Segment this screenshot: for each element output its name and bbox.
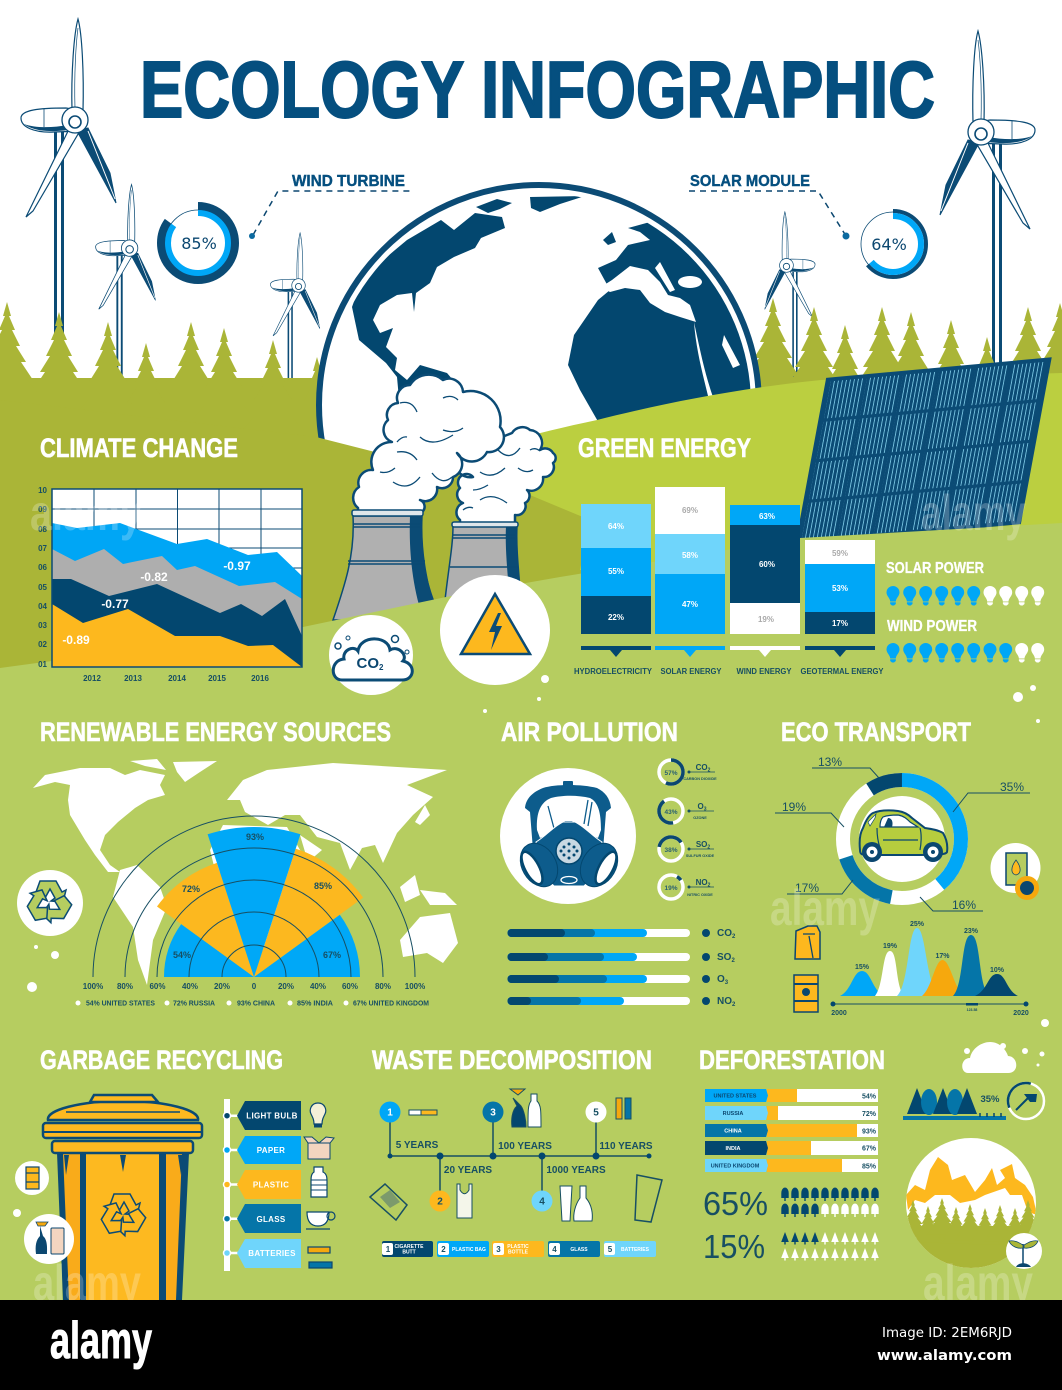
donut: eco transport	[775, 755, 1030, 920]
gas donuts: 57%	[664, 770, 678, 777]
bars: deforestation: UNITED STATES	[714, 1094, 757, 1100]
mountain chart: fuel use: 2020	[1013, 1010, 1029, 1017]
legend: countries	[76, 1000, 429, 1008]
area chart: climate change: 09	[38, 505, 48, 514]
gas donuts: 19%	[664, 885, 678, 892]
icon: axe gauge	[1003, 1078, 1049, 1124]
icon: gas mask	[500, 768, 636, 904]
progress bars: gases	[508, 928, 736, 1008]
stacked bars: green energy: 59%	[832, 549, 848, 558]
legend: waste items: 5	[608, 1245, 613, 1254]
pictogram: 15 percent	[703, 1228, 879, 1265]
mountain chart: fuel use: 25%	[910, 921, 925, 928]
footer bar: www.alamy.com	[877, 1348, 1012, 1364]
timeline: waste decomposition: 3	[490, 1108, 496, 1118]
area chart: climate change: 02	[38, 640, 48, 649]
pictogram: solar power: SOLAR POWER	[886, 560, 984, 577]
globe	[316, 182, 762, 452]
list: recyclable materials: LIGHT BULB	[246, 1112, 298, 1120]
polar chart: renewable energy: 20%	[278, 982, 294, 991]
polar chart: renewable energy: 60%	[342, 982, 358, 991]
gas donuts: O	[697, 802, 704, 811]
callout: wind turbine: WIND TURBINE	[292, 173, 405, 190]
stacked bars: green energy: HYDROELECTRICITY	[574, 667, 653, 676]
polar chart: renewable energy: 40%	[310, 982, 326, 991]
polar chart: renewable energy: 80%	[117, 982, 133, 991]
timeline: waste decomposition: 20 YEARS	[444, 1165, 492, 1176]
bars: deforestation: CHINA	[724, 1128, 742, 1134]
stacked bars: green energy: 60%	[759, 560, 775, 569]
polar chart: renewable energy	[83, 816, 425, 991]
stacked bars: green energy: 63%	[759, 512, 775, 521]
stacked bars: green energy: 69%	[682, 506, 698, 515]
area chart: climate change: 2014	[168, 674, 186, 683]
gas donuts	[655, 760, 717, 903]
legend: waste items: BATTERIES	[621, 1247, 650, 1253]
bars: deforestation: RUSSIA	[723, 1111, 743, 1117]
donut: eco transport: 35%	[1000, 780, 1024, 794]
mountain chart: fuel use: 19%	[883, 943, 898, 950]
stacked bars: green energy	[574, 487, 884, 676]
area chart: climate change: 08	[38, 525, 48, 534]
heading: eco transport: ECO TRANSPORT	[781, 717, 971, 747]
progress bars: gases: 2	[732, 1002, 736, 1008]
stacked bars: green energy: GEOTERMAL ENERGY	[800, 667, 884, 676]
gas donuts: 38%	[664, 847, 678, 854]
legend: countries: 54% UNITED STATES	[86, 1000, 155, 1008]
bars: deforestation: INDIA	[726, 1146, 741, 1152]
donut: 64 percent: 64%	[871, 235, 907, 254]
timeline: waste decomposition	[380, 1102, 653, 1212]
main green ground	[0, 523, 1062, 1300]
icon: CO2 cloud: CO	[357, 655, 379, 672]
heading: climate change: CLIMATE CHANGE	[40, 433, 238, 463]
bars: deforestation	[705, 1089, 878, 1172]
legend: waste items: PLASTIC	[507, 1244, 529, 1250]
list: recyclable materials: PLASTIC	[253, 1180, 289, 1190]
progress bars: gases: NO	[717, 996, 732, 1007]
pictogram: 65 percent	[703, 1185, 879, 1222]
area chart: climate change: 05	[38, 583, 48, 592]
progress bars: gases: 2	[732, 934, 736, 940]
footer bar: alamy	[50, 1312, 152, 1370]
donut: 64 percent	[860, 211, 926, 277]
cooling tower 2	[445, 522, 521, 600]
bars: deforestation: UNITED KINGDOM	[711, 1164, 760, 1170]
area chart: climate change: -0.97	[223, 559, 251, 573]
heading: deforestation: DEFORESTATION	[699, 1045, 885, 1075]
area chart: climate change: -0.82	[140, 570, 168, 584]
timeline: waste decomposition: 4	[539, 1196, 545, 1208]
icon: radioactive barrel	[794, 975, 818, 1012]
timeline: waste decomposition: 1	[387, 1108, 393, 1118]
icon: cloud	[962, 1042, 1044, 1073]
timeline: waste decomposition: 5	[593, 1108, 599, 1118]
stacked bars: green energy: 17%	[832, 619, 848, 628]
area chart: climate change: 06	[38, 563, 48, 572]
legend: waste items: 4	[552, 1245, 557, 1254]
pictogram: wind power: WIND POWER	[887, 618, 977, 635]
watermarks: alamy	[33, 1255, 141, 1311]
polar chart: renewable energy: 93%	[246, 832, 264, 842]
area chart: climate change: 2012	[83, 674, 101, 683]
forest cut indicator: 35%	[980, 1094, 1000, 1105]
mountain chart: fuel use: 17%	[935, 953, 950, 960]
gas donuts: NO	[696, 878, 708, 887]
footer bar	[0, 1300, 1062, 1390]
bars: deforestation: 67%	[862, 1146, 877, 1152]
area chart: climate change	[38, 486, 302, 683]
icon: CO2 cloud: 2	[379, 663, 384, 672]
gas donuts: SULFUR OXIDE	[686, 854, 715, 858]
list: recyclable materials: BATTERIES	[248, 1249, 296, 1258]
polar chart: renewable energy: 54%	[173, 950, 191, 960]
bars: deforestation: 72%	[862, 1111, 877, 1118]
timeline: waste decomposition: 100 YEARS	[498, 1141, 552, 1152]
progress bars: gases: 2	[731, 958, 735, 964]
stacked bars: green energy: 64%	[608, 522, 624, 531]
heading: renewable energy sources: RENEWABLE ENERGY SOURCES	[40, 717, 391, 747]
icon: CO2 cloud	[329, 615, 413, 695]
wind turbines right	[765, 31, 1035, 404]
watermarks: alamy	[923, 1255, 1033, 1311]
area chart: climate change: 04	[38, 602, 48, 611]
donut: eco transport: 16%	[952, 898, 976, 912]
legend: countries: 85% INDIA	[297, 1000, 333, 1008]
watermarks: alamy	[30, 485, 142, 541]
area chart: climate change: 01	[38, 660, 48, 669]
legend: waste items: 3	[496, 1245, 501, 1254]
heading: waste decomposition: WASTE DECOMPOSITION	[372, 1045, 652, 1075]
legend: waste items: GLASS	[570, 1247, 588, 1253]
gas donuts: 43%	[664, 809, 678, 816]
mountain chart: fuel use: 2000	[831, 1010, 847, 1017]
legend: waste items: BOTTLE	[508, 1250, 529, 1256]
watermarks: alamy	[770, 880, 880, 936]
lime hill right	[453, 373, 1062, 570]
callout: solar module: SOLAR MODULE	[690, 173, 810, 190]
heading: air pollution: AIR POLLUTION	[501, 717, 678, 747]
progress bars: gases: O	[717, 974, 725, 985]
mountain chart: fuel use: 23%	[964, 928, 979, 935]
list: recyclable materials: GLASS	[256, 1215, 286, 1224]
icon: biofuel barrel	[990, 843, 1040, 900]
stacked bars: green energy: 47%	[682, 600, 698, 609]
polar chart: renewable energy: 60%	[149, 982, 166, 991]
legend: waste items: 1	[386, 1245, 391, 1254]
gas donuts: CO	[696, 763, 708, 772]
icon: spray and carton badge	[24, 1214, 74, 1264]
illustration: forest fire	[906, 1138, 1036, 1268]
area chart: climate change: 2013	[124, 674, 142, 683]
legend: countries: 67% UNITED KINGDOM	[353, 1000, 429, 1008]
callout: solar module	[684, 173, 850, 240]
forest cut indicator	[903, 1088, 1006, 1120]
stacked bars: green energy: 58%	[682, 551, 698, 560]
solar panel	[797, 358, 1050, 544]
legend: countries: 93% CHINA	[237, 1000, 275, 1008]
pictogram: wind power	[886, 618, 1044, 662]
donut: 85 percent	[161, 206, 235, 280]
gas donuts: SO	[696, 840, 707, 849]
mountain chart: fuel use: 15%	[855, 964, 870, 971]
timeline: waste decomposition: 1000 YEARS	[546, 1165, 606, 1176]
legend: waste items: PLASTIC BAG	[452, 1247, 486, 1253]
timeline: waste decomposition: 110 YEARS	[599, 1141, 653, 1152]
olive hill left	[0, 400, 600, 680]
forest silhouette	[0, 298, 1062, 678]
polar chart: renewable energy: 85%	[314, 881, 332, 891]
stacked bars: green energy: 22%	[608, 613, 624, 622]
legend: waste items: BUTT	[402, 1250, 416, 1256]
pictogram: 15 percent: 15%	[703, 1228, 765, 1265]
progress bars: gases: CO	[717, 928, 732, 939]
pictogram: solar power	[886, 560, 1044, 606]
donut: eco transport: 17%	[795, 881, 819, 895]
bars: deforestation: 93%	[862, 1128, 877, 1136]
polar chart: renewable energy: 72%	[182, 884, 200, 894]
area chart: climate change: 07	[38, 544, 48, 553]
area chart: climate change: 2016	[251, 674, 269, 683]
progress bars: gases: 3	[725, 980, 729, 986]
icon: recycling badge	[17, 870, 83, 936]
gas donuts: CARBON DIOXIDE	[683, 777, 717, 781]
area chart: climate change: 03	[38, 621, 48, 630]
bars: deforestation: 85%	[862, 1164, 877, 1170]
stacked bars: green energy: SOLAR ENERGY	[660, 667, 722, 676]
icon: high voltage sign	[440, 575, 550, 685]
gas donuts: 3	[704, 806, 707, 812]
stacked bars: green energy: 53%	[832, 584, 848, 593]
timeline: waste decomposition: 2	[437, 1196, 443, 1208]
heading: green energy: GREEN ENERGY	[578, 433, 751, 463]
stacked bars: green energy: 55%	[608, 567, 624, 576]
polar chart: renewable energy: 100%	[83, 982, 103, 991]
legend: waste items: 2	[441, 1245, 446, 1254]
icons: waste items	[370, 1089, 662, 1222]
decorative dots	[13, 675, 1049, 1217]
donut: 85 percent: 85%	[181, 234, 217, 253]
donut: eco transport: 19%	[782, 800, 806, 814]
list: recyclable materials: PAPER	[257, 1146, 285, 1155]
gas donuts: 2	[707, 844, 710, 850]
area chart: climate change: -0.89	[62, 633, 90, 647]
gas donuts: OZONE	[693, 816, 707, 820]
polar chart: renewable energy: 67%	[323, 950, 341, 960]
mountain chart: fuel use: 123.58	[967, 1008, 977, 1012]
area chart: climate change: -0.77	[101, 597, 129, 611]
progress bars: gases: SO	[717, 952, 731, 963]
timeline: waste decomposition: 5 YEARS	[396, 1140, 439, 1151]
stacked bars: green energy: WIND ENERGY	[736, 667, 792, 676]
icon: sprout	[1006, 1233, 1042, 1269]
footer bar: Image ID: 2EM6RJD	[882, 1325, 1012, 1341]
cooling tower 1	[333, 510, 436, 620]
legend: waste items	[382, 1241, 656, 1257]
gas donuts: NITRIC OXIDE	[687, 893, 713, 897]
world map	[33, 759, 458, 985]
gas donuts: 2	[708, 768, 711, 774]
legend: waste items: CIGARETTE	[395, 1244, 424, 1250]
donut: eco transport: 13%	[818, 755, 842, 769]
mountain chart: fuel use: 10%	[990, 967, 1005, 974]
polar chart: renewable energy: 100%	[405, 982, 425, 991]
mountain chart: fuel use	[830, 921, 1029, 1017]
watermarks	[30, 485, 1033, 1311]
legend: countries: 72% RUSSIA	[173, 1000, 215, 1008]
smoke plumes	[353, 375, 556, 524]
polar chart: renewable energy: 0	[252, 982, 257, 991]
heading: garbage recycling: GARBAGE RECYCLING	[40, 1045, 283, 1075]
icons: recyclable items	[304, 1103, 335, 1268]
pictogram: 65 percent: 65%	[703, 1185, 768, 1222]
icon: electric car	[860, 810, 947, 862]
watermarks: alamy	[921, 485, 1026, 541]
polar chart: renewable energy: 80%	[375, 982, 391, 991]
polar chart: renewable energy: 20%	[214, 982, 230, 991]
area chart: climate change: 2015	[208, 674, 226, 683]
icon: recycling bin	[43, 1095, 202, 1300]
wind turbines left	[21, 19, 320, 421]
icon: jerry can	[795, 926, 820, 959]
area chart: climate change: 10	[38, 486, 48, 495]
callout: wind turbine	[249, 173, 414, 239]
polar chart: renewable energy: 40%	[182, 982, 198, 991]
gas donuts: 2	[708, 882, 711, 888]
bars: deforestation: 54%	[862, 1094, 877, 1100]
icon: barrel badge	[15, 1161, 49, 1195]
list: recyclable materials	[224, 1099, 301, 1271]
stacked bars: green energy: 19%	[758, 615, 774, 624]
